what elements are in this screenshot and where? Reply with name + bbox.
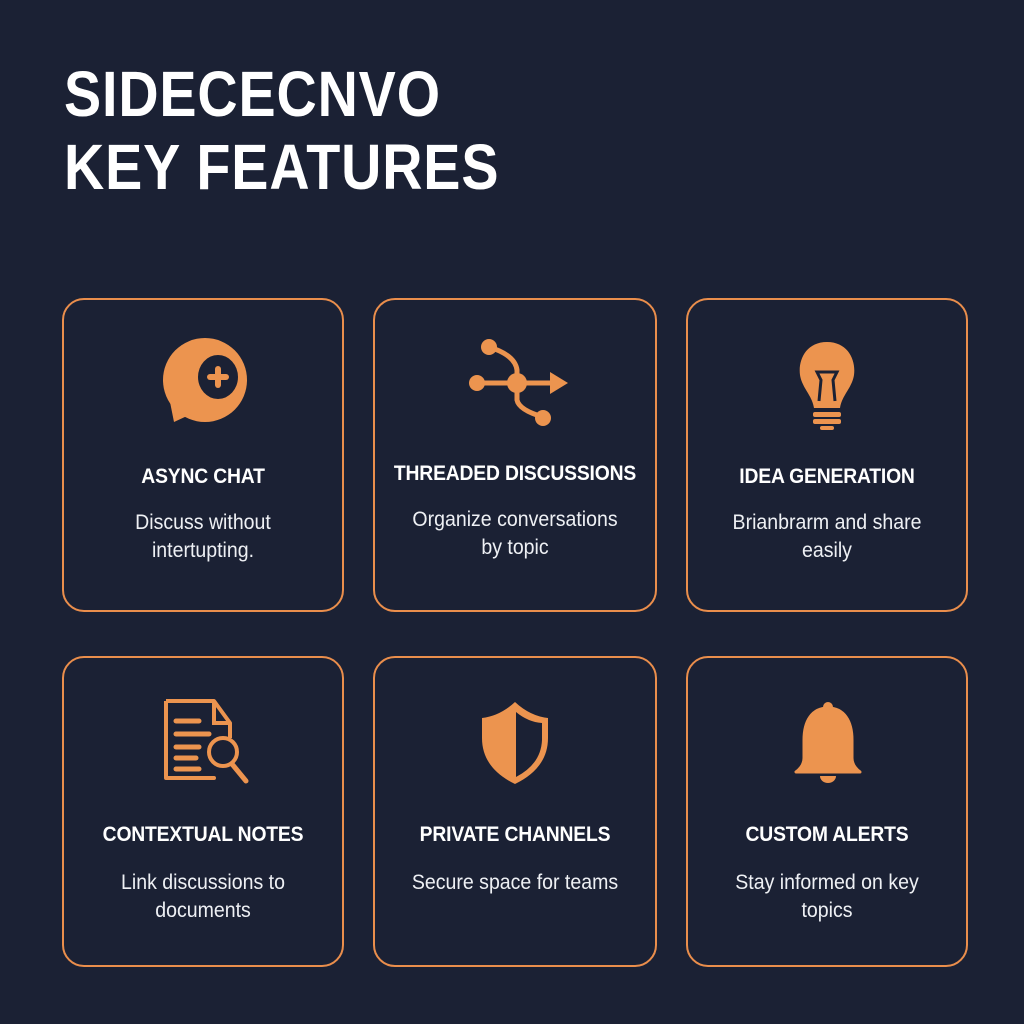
text: Link discussions to — [121, 871, 285, 894]
heading: PRIVATE CHANNELS — [420, 823, 610, 846]
heading: THREADED DISCUSSIONS — [394, 462, 636, 485]
text — [735, 871, 919, 922]
panel: async chat — [62, 298, 344, 612]
text: Brianbrarm and share — [733, 511, 921, 534]
text: easily — [802, 539, 852, 562]
icon: chat bubble — [163, 338, 247, 422]
text — [733, 511, 921, 562]
text: intertupting. — [152, 539, 254, 562]
text — [412, 508, 618, 559]
icon: light bulb — [800, 342, 854, 430]
panel: private channels — [373, 656, 657, 967]
icon: branches — [469, 339, 568, 426]
heading: CONTEXTUAL NOTES — [103, 823, 303, 846]
text: Stay informed on key — [735, 871, 919, 894]
panel: custom alerts — [686, 656, 968, 967]
text — [135, 511, 271, 562]
icon: shield — [482, 702, 548, 784]
text: topics — [801, 899, 853, 922]
title: KEY FEATURES — [64, 131, 499, 203]
text: Organize conversations — [412, 508, 618, 531]
text: Discuss without — [135, 511, 271, 534]
heading: CUSTOM ALERTS — [746, 823, 908, 846]
title: SIDECECNVO — [64, 58, 441, 130]
title — [64, 58, 499, 203]
text — [121, 871, 285, 922]
icon: document search — [164, 699, 248, 784]
panel: contextual notes — [62, 656, 344, 967]
text: documents — [155, 899, 251, 922]
heading: ASYNC CHAT — [141, 465, 265, 488]
panel: threaded discussions — [373, 298, 657, 612]
heading: IDEA GENERATION — [739, 465, 915, 488]
text: by topic — [481, 536, 549, 559]
panel: idea generation — [686, 298, 968, 612]
icon: bell — [794, 702, 862, 783]
text: Secure space for teams — [412, 871, 618, 894]
